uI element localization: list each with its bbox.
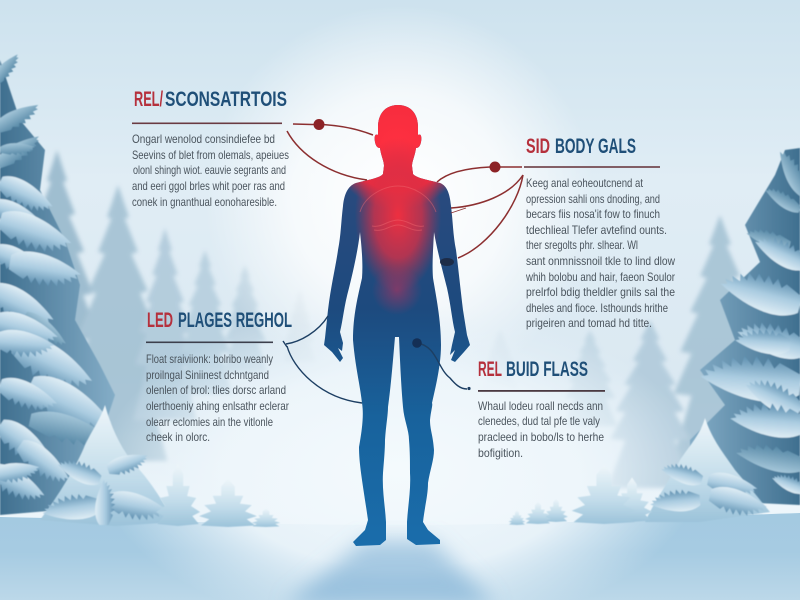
heading rule [524,166,660,168]
red chest glow [356,144,440,288]
body text: Seevins of blet from olemals, apeiues [132,148,289,162]
connector: top right callout to shoulder and arm [437,162,523,266]
heading rule [146,342,273,343]
foot shadow [285,540,495,600]
heading [134,87,287,111]
body text: becars fiis nosa'it fow to finuch [526,207,660,221]
heading: REL [478,357,502,381]
connector: lower left callout to hand and thigh [283,316,362,403]
body text: pracleed in bobo/ls to herhe [478,430,604,444]
body text: ther sregolts phr. slhear. Wl [526,238,638,252]
panel: lower left [146,308,292,444]
body text: olerthoeniy ahing enlsathr eclerar [146,399,289,413]
heading: SCONSATRTOIS [165,87,287,111]
body text: proilngal Siniinest dchntgand [146,368,269,382]
body text: prelrfol bdig theldler gnils sal the [526,285,675,299]
body text [146,352,289,444]
body text: olonl shingh wiot. eauvie segrants and [133,163,286,177]
body text: tdechlieal Tlefer avtefind ounts. [526,223,667,237]
heading rule [478,390,605,392]
heading [526,134,636,158]
large fir tree right [690,147,800,505]
large fir tree left [0,50,119,515]
body text: olearr eclomies ain the vitlonle [146,415,273,429]
human body figure [324,105,470,546]
body text: and eeri ggol brles whit poer ras and [132,179,285,193]
panel: top right [524,134,675,330]
body text: cheek in olorc. [146,430,210,444]
heading [147,308,292,332]
body text: dheles and fioce. Isthounds hrithe [526,301,668,315]
bright snow centre [0,300,800,600]
central glow [200,0,600,400]
body text: Ongarl wenolod consindiefee bd [132,132,275,146]
heading: BODY GALS [555,134,636,158]
heading: LED [147,308,173,332]
heading: SID [526,134,550,158]
chest contour lines [360,186,436,230]
body text: olenlen of brol: tlies dorsc arland [146,383,286,397]
body text: whih bolobu and hair, faeon Soulor [525,270,675,284]
body text: clenedes, dud tal pfe tle valy [478,414,600,428]
body text: prigeiren and tomad hd titte. [526,316,652,330]
body text: Whaul lodeu roall necds ann [478,399,603,413]
distant blurred forest right [482,215,770,488]
small snowy bush left [40,405,175,526]
heading rule [132,122,282,124]
heading: PLAGES REGHOL [178,308,292,332]
distant blurred forest left [12,150,316,461]
body text: bofigition. [478,446,523,460]
heading [478,357,588,381]
red head and neck glow [349,105,446,203]
low ferns right [508,465,652,525]
snowy bush right [645,418,770,522]
panel: lower right [478,357,605,460]
body text: Float sraiviionk: bolribo weanly [146,352,273,366]
heading: BUID FLASS [506,357,588,381]
low ferns left [156,464,280,527]
panel: top left [132,87,289,209]
body text: Keeg anal eoheoutcnend at [526,176,644,190]
body text [525,176,675,330]
snow ground [0,513,800,600]
heading: REL/ [134,87,163,111]
body text: conek in gnanthual eonoharesible. [132,195,277,209]
red abdomen glow [374,271,420,312]
connector: top left callout to head [287,119,373,180]
connector: lower right callout to thigh [412,338,471,390]
body text: sant onmnissnoil tkle to lind dlow [526,254,675,268]
body text [132,132,289,209]
body text: opression sahli ons dnoding, and [526,192,660,206]
body text [478,399,604,460]
